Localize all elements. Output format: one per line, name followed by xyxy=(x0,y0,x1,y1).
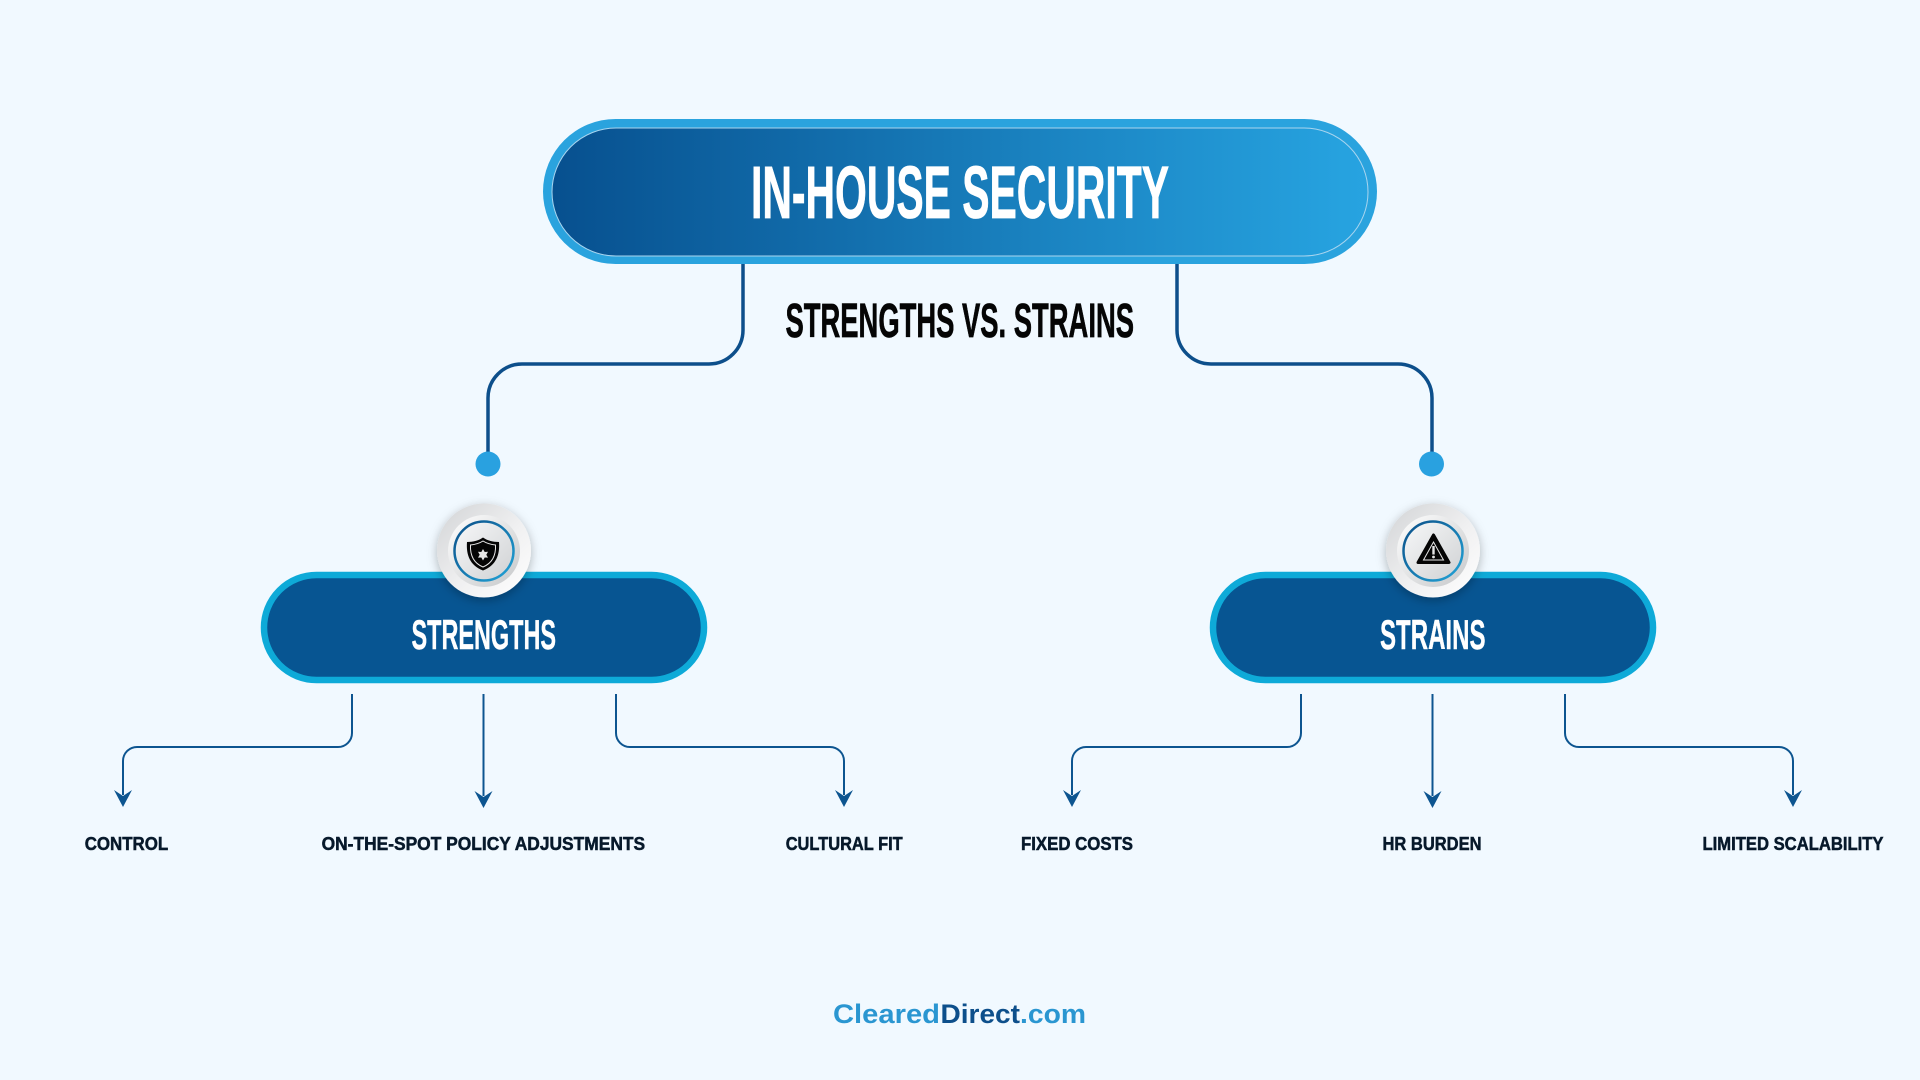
arrow: to limited scalability xyxy=(1565,694,1802,807)
icon: warning triangle xyxy=(1386,504,1480,598)
strains pill xyxy=(1213,575,1653,680)
label: control: CONTROL xyxy=(85,834,168,854)
arrow: to on-the-spot policy adjustments xyxy=(474,694,492,808)
icon: shield xyxy=(437,504,531,598)
arrow: to cultural fit xyxy=(616,694,853,807)
connector: title to strains xyxy=(1177,264,1444,476)
footer: website xyxy=(833,999,1086,1029)
subtitle: STRENGTHS VS. STRAINS xyxy=(786,295,1134,348)
panel: strengths xyxy=(85,504,903,854)
strengths heading: STRENGTHS xyxy=(412,611,556,658)
footer: website: .com xyxy=(1020,999,1086,1029)
arrow: to control xyxy=(114,694,352,807)
label: cultural fit: CULTURAL FIT xyxy=(786,834,903,854)
label: limited scalability: LIMITED SCALABILITY xyxy=(1702,834,1884,854)
footer: website: Direct xyxy=(940,999,1020,1029)
title: IN-HOUSE SECURITY xyxy=(751,151,1169,234)
label: fixed costs: FIXED COSTS xyxy=(1021,834,1133,854)
connector: title to strengths xyxy=(476,264,743,476)
label: on-the-spot policy adjustments: ON-THE-SPOT POLICY ADJUSTMENTS xyxy=(322,834,645,854)
strains heading: STRAINS xyxy=(1380,611,1486,658)
footer: website: Cleared xyxy=(833,999,940,1029)
label: hr burden: HR BURDEN xyxy=(1382,834,1482,854)
panel: strains xyxy=(1021,504,1884,854)
title pill xyxy=(543,119,1377,264)
strengths pill xyxy=(264,575,704,680)
arrow: to fixed costs xyxy=(1063,694,1301,807)
arrow: to hr burden xyxy=(1424,694,1442,808)
